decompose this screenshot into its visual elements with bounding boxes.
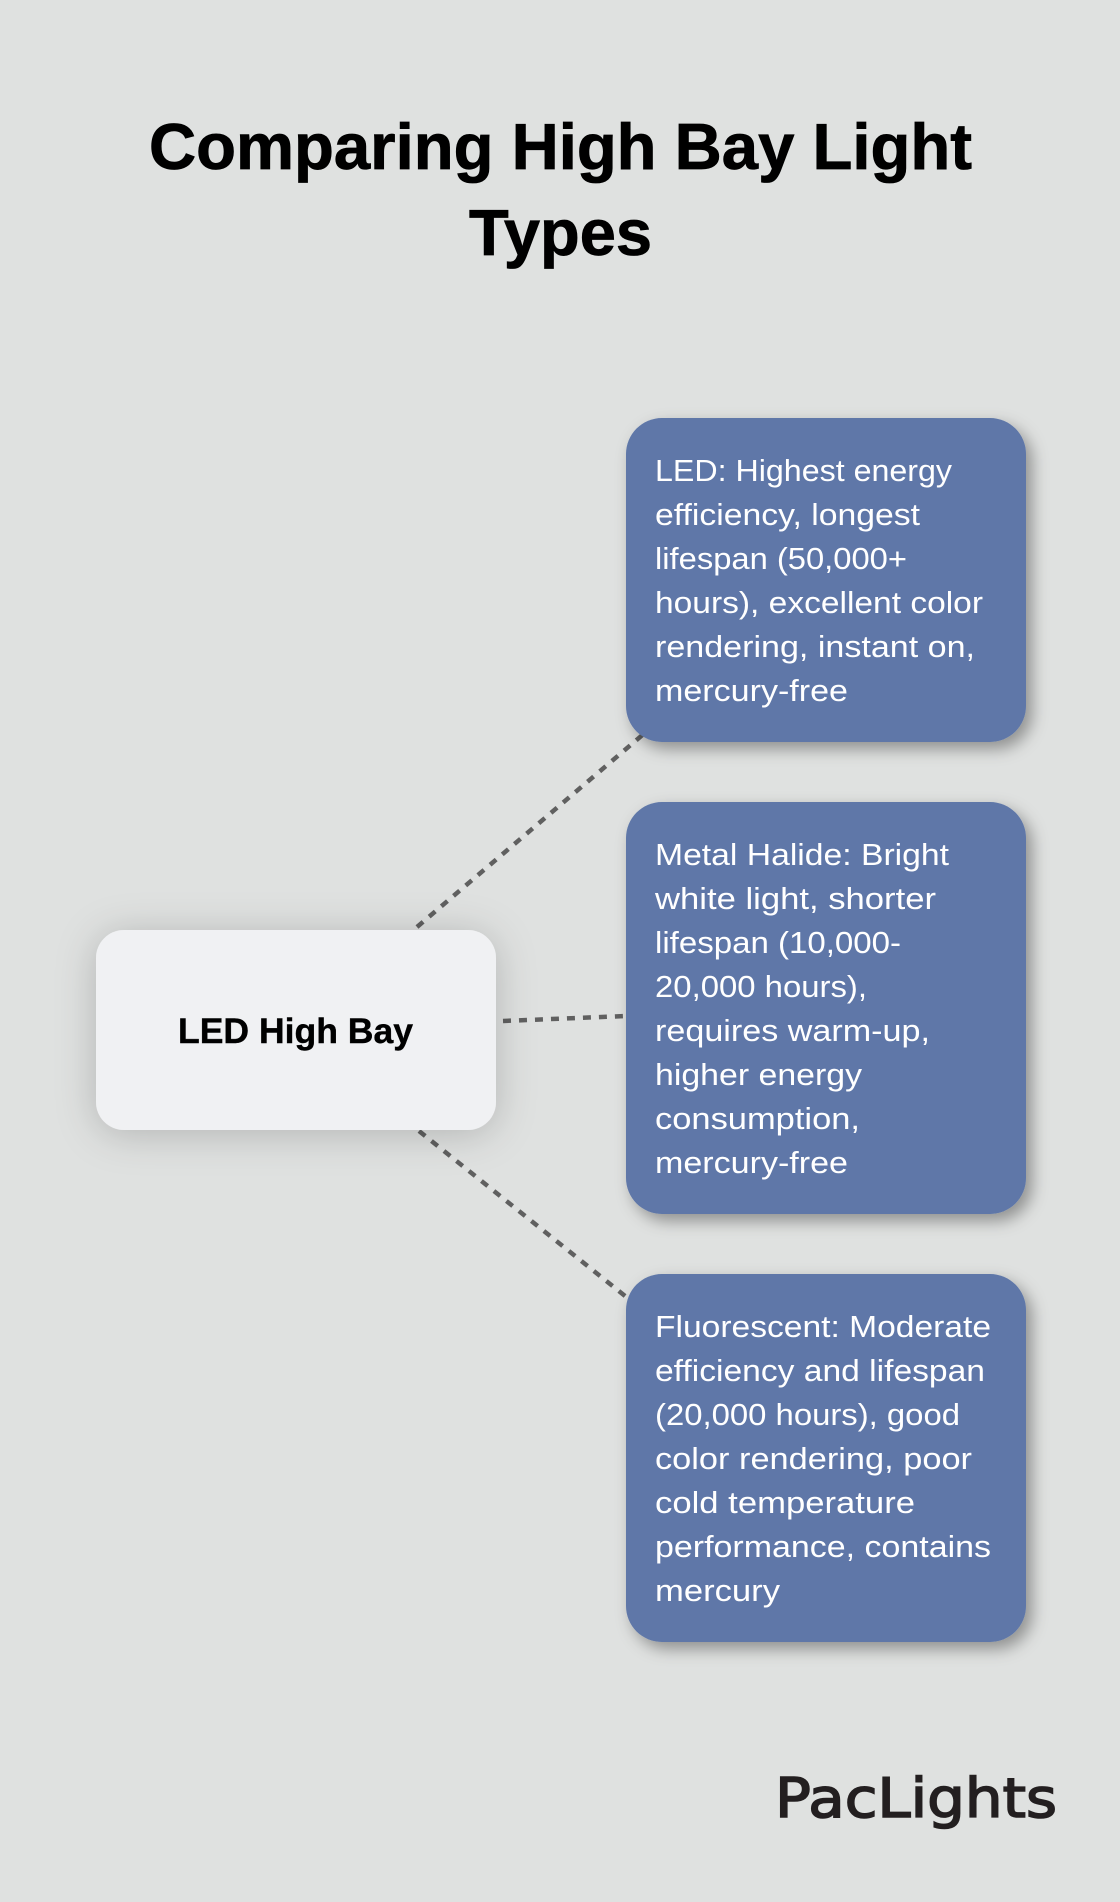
panel: LED — [626, 418, 1026, 742]
panel: Fluorescent — [626, 1274, 1026, 1642]
LED description: mercury-free — [655, 673, 848, 708]
Fluorescent description: efficiency and lifespan — [655, 1353, 985, 1388]
Fluorescent description: (20,000 hours), good — [655, 1397, 960, 1432]
Metal Halide description: mercury-free — [655, 1145, 848, 1180]
Fluorescent description — [655, 1309, 991, 1608]
title: Comparing High Bay Light — [149, 110, 972, 183]
connector: hub to Fluorescent panel — [419, 1131, 640, 1308]
Metal Halide description: white light, shorter — [654, 881, 936, 916]
LED description: hours), excellent color — [655, 585, 983, 620]
title: Types — [469, 196, 652, 269]
LED description: rendering, instant on, — [655, 629, 975, 664]
connector: hub to LED panel — [417, 720, 660, 927]
LED description: efficiency, longest — [655, 497, 920, 532]
hub label: LED High Bay — [178, 1012, 414, 1051]
Metal Halide description: lifespan (10,000- — [655, 925, 901, 960]
panel: LED High Bay hub — [96, 930, 496, 1130]
Metal Halide description: consumption, — [655, 1101, 860, 1136]
Metal Halide description: requires warm-up, — [655, 1013, 930, 1048]
Metal Halide description: 20,000 hours), — [655, 969, 867, 1004]
Fluorescent description: Fluorescent: Moderate — [655, 1309, 991, 1344]
panel: Metal Halide — [626, 802, 1026, 1214]
Metal Halide description: higher energy — [655, 1057, 863, 1092]
logo: PacLights: PacLights — [775, 1767, 1057, 1830]
Metal Halide description — [654, 837, 949, 1180]
Fluorescent description: mercury — [655, 1573, 781, 1608]
title — [149, 110, 972, 269]
connector: hub to Metal Halide panel — [503, 1016, 626, 1021]
Metal Halide description: Metal Halide: Bright — [655, 837, 949, 872]
Fluorescent description: color rendering, poor — [655, 1441, 972, 1476]
LED description: lifespan (50,000+ — [655, 541, 907, 576]
Fluorescent description: cold temperature — [655, 1485, 915, 1520]
LED description: LED: Highest energy — [655, 453, 953, 488]
LED description — [655, 453, 983, 708]
Fluorescent description: performance, contains — [655, 1529, 991, 1564]
